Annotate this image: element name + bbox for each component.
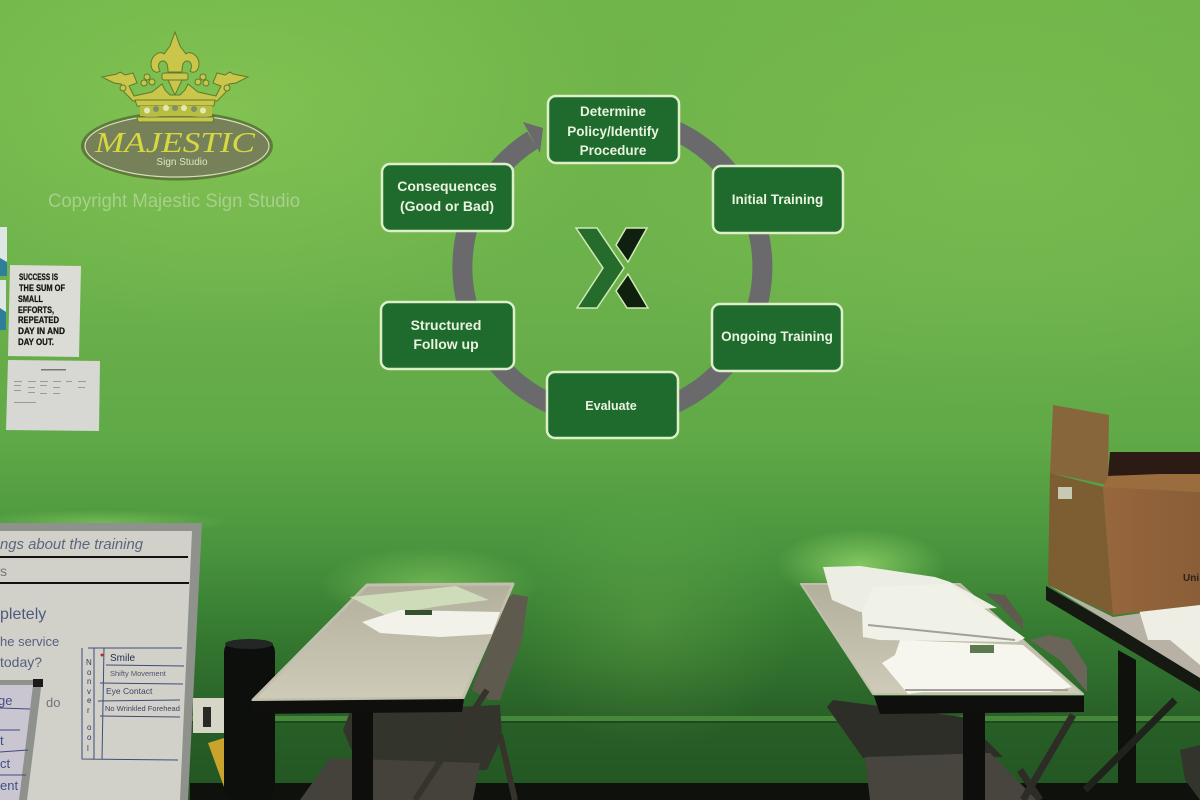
whiteboard handwriting: he service [0,634,59,649]
whiteboard table: Nonverbal: e [87,696,92,705]
folding chairs [300,594,528,800]
poster: success quote: SMALL [18,294,43,304]
step: Determine Policy: Procedure [580,143,647,158]
outlet and tower fan [193,639,275,800]
logo jewels [144,105,206,114]
logo wordmark: MAJESTIC [94,127,256,159]
arrow head [523,122,543,153]
whiteboard handwriting [0,536,144,710]
whiteboard table: Nonverbal: r [87,706,90,715]
small whiteboard: ent [0,778,18,793]
step: Ongoing Training: Ongoing Training [721,329,833,344]
logo: Majestic Sign Studio [48,32,300,212]
right table with shirts [801,566,1087,800]
poster: success quote: DAY IN AND [18,326,65,336]
whiteboard table: Nonverbal [82,648,184,760]
whiteboard table: Nonverbal: o [87,723,92,732]
whiteboard [0,523,202,800]
table top [801,584,1083,694]
small whiteboard: ct [0,756,10,771]
whiteboard table: Nonverbal: v [87,687,91,696]
step: Consequences: (Good or Bad) [400,198,494,214]
step: Initial Training: Initial Training [732,192,823,207]
box interior [1108,452,1200,476]
box left face [1048,473,1113,615]
copyright: Copyright Majestic Sign Studio [48,190,300,212]
poster: success quote: DAY OUT. [18,337,54,347]
step: Initial Training [713,166,843,233]
logo oval [81,112,273,180]
cardboard box and far table [1046,405,1200,800]
poster: success quote: EFFORTS, [18,305,54,315]
poster: success quote: REPEATED [18,315,59,325]
step: Structured Follow up [381,302,514,369]
step: Determine Policy: Policy/Identify [567,124,659,139]
process cycle diagram [381,96,843,438]
whiteboard handwriting: today? [0,654,42,670]
whiteboard table: Nonverbal: l [87,744,89,753]
step: Consequences [382,164,513,231]
step: Ongoing Training [712,304,842,371]
posters on left wall [0,227,100,431]
folding chairs [827,593,1087,800]
box top [1103,474,1200,492]
far table [1046,586,1200,800]
whiteboard table: Nonverbal: Smile [110,653,135,664]
icon: crown [102,32,248,122]
whiteboard handwriting: do [46,695,60,710]
step: Structured Follow up: Follow up [413,336,479,352]
center table with papers [252,584,528,800]
small whiteboard [0,679,43,800]
small whiteboard: t [0,733,4,748]
step: Evaluate: Evaluate [585,399,637,413]
whiteboard table: Nonverbal: o [87,668,92,677]
poster: success quote [8,265,81,357]
whiteboard table: Nonverbal: Shifty Movement [110,669,167,678]
whiteboard table: Nonverbal: n [87,677,91,686]
icon: X logo [576,228,648,308]
whiteboard handwriting: s [0,563,7,579]
logo subline: Sign Studio [156,157,208,168]
table top [253,584,513,700]
step: Determine Policy: Determine [580,104,646,119]
cycle ring [462,120,762,417]
whiteboard table: Nonverbal: o [87,733,92,742]
whiteboard table: Nonverbal: N [86,658,92,667]
papers [350,586,489,615]
step: Evaluate [547,372,678,438]
box flap [1050,405,1109,485]
box label: Uni [1183,573,1199,584]
box front [1103,487,1200,615]
whiteboard table: Nonverbal: Eye Contact [106,686,153,696]
poster: success quote: THE SUM OF [19,283,65,293]
step: Consequences: Consequences [397,178,497,194]
poster: schedule sheet [6,360,100,431]
stacks of shirts [823,566,1072,694]
poster: success quote: SUCCESS IS [19,272,58,282]
step: Determine Policy [548,96,679,163]
step: Structured Follow up: Structured [411,317,481,333]
whiteboard handwriting: pletely [0,606,46,623]
whiteboard table: Nonverbal: No Wrinkled Forehead [105,704,180,713]
poster edge [0,227,7,330]
whiteboard handwriting: ngs about the training [0,536,144,553]
